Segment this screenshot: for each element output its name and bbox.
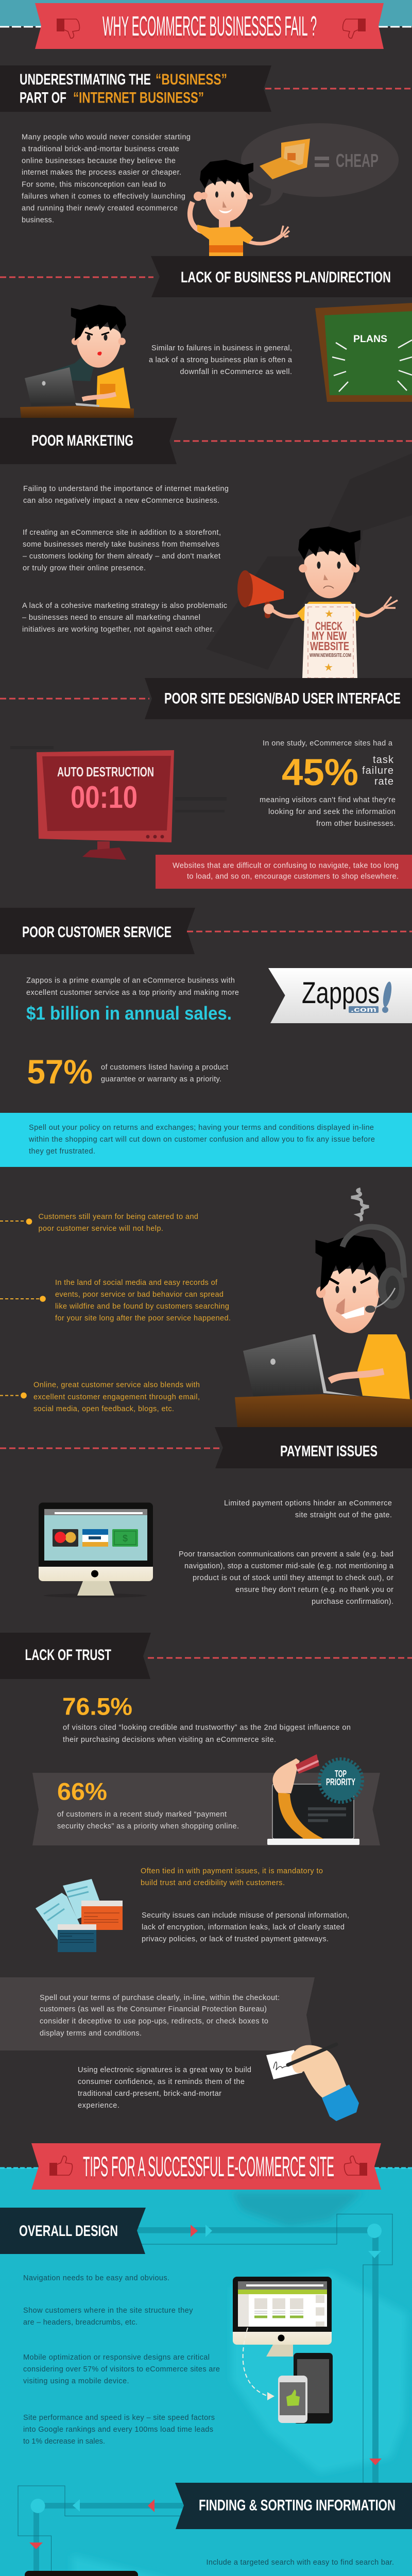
text: poor marketing paragraphs: or truly grow their online presence. xyxy=(23,564,146,572)
badge: top priority xyxy=(319,1759,363,1802)
icon: dollar bill: $ xyxy=(123,1533,128,1544)
flow connector: finding xyxy=(18,2486,184,2576)
text: zappos example: $1 billion in annual sales. xyxy=(26,1003,232,1024)
stat: 45 percent task failure: from other businesses. xyxy=(316,820,396,828)
point: social media: In the land of social media and easy records of xyxy=(55,1279,218,1287)
text: overall design tips: considering over 57% of visitors to eCommerce sites are xyxy=(23,2365,220,2374)
text: limited payment options: product is out of stock until they attempt to check out), or xyxy=(193,1574,393,1582)
stat: 45 percent task failure: looking for and seek the information xyxy=(268,808,396,816)
stat: 57 percent xyxy=(27,1053,228,1091)
text: tied with payment issues: lack of encryption, information leaks, lack of clearly stated xyxy=(142,1923,345,1931)
text: overall design tips xyxy=(23,2274,220,2446)
heading: overall design xyxy=(0,2208,146,2254)
stat: 76.5 percent: of visitors cited “looking credible and trustworthy” as the 2nd biggest influence on xyxy=(63,1724,351,1732)
panel: 66 percent payment security: security checks” as a priority when shopping online. xyxy=(57,1822,239,1831)
text: tied with payment issues: Security issues can include misuse of personal information, xyxy=(142,1911,349,1920)
text: electronic signatures: experience. xyxy=(78,2102,119,2110)
panel: 66 percent payment security: of customers in a recent study marked “payment xyxy=(57,1810,227,1819)
stat: 45 percent task failure xyxy=(260,739,396,828)
character: thinking man xyxy=(190,160,289,256)
heading: poor marketing xyxy=(0,418,412,464)
text: poor marketing paragraphs: A lack of a cohesive marketing strategy is also problematic xyxy=(22,602,227,610)
panel: spell out terms of purchase: Spell out your terms of purchase clearly, in-line, within the checkout: xyxy=(40,1994,280,2002)
text: limited payment options: navigation), stop a customer mid-sale (e.g. not mentioning a xyxy=(184,1562,394,1570)
heading: lack of trust: LACK OF TRUST xyxy=(25,1647,111,1664)
text: tied with payment issues: build trust and credibility with customers. xyxy=(141,1879,285,1887)
stat: 57 percent: of customers listed having a product xyxy=(101,1063,228,1072)
point: social media: events, poor service or bad behavior can spread xyxy=(55,1291,224,1299)
logo: zappos: .com xyxy=(351,1005,376,1013)
chalkboard: plans xyxy=(315,303,412,402)
text: limited payment options: Limited payment options hinder an eCommerce xyxy=(224,1499,392,1507)
text: poor marketing paragraphs: – businesses need to ensure all marketing channel xyxy=(22,614,200,622)
stat: 57 percent: 57% xyxy=(27,1053,93,1091)
text: overall design tips: Mobile optimization or responsive designs are critical xyxy=(23,2353,210,2362)
title ribbon: why ecommerce businesses fail xyxy=(35,3,384,49)
apron: ★ xyxy=(324,608,334,620)
point: online customer service: excellent customer engagement through email, xyxy=(33,1393,200,1401)
heading: poor marketing: POOR MARKETING xyxy=(31,432,133,449)
stat: 45 percent task failure: 45% xyxy=(282,752,358,793)
point: customers still yearn xyxy=(0,1213,198,1233)
text: many people: and running their newly created ecommerce xyxy=(22,205,178,213)
text: overall design tips: Site performance and speed is key – site speed factors xyxy=(23,2414,215,2422)
desk xyxy=(235,1394,412,1427)
chalkboard: plans: PLANS xyxy=(353,334,387,345)
speech bubble: laptop equals cheap: CHEAP xyxy=(336,150,379,171)
text: many people: For some, this misconception can lead to xyxy=(22,180,166,189)
text: electronic signatures: Using electronic signatures is a great way to build xyxy=(78,2066,251,2074)
heading: poor site design xyxy=(0,678,412,719)
heading: lack of business plan xyxy=(0,256,412,297)
text: zappos example xyxy=(26,977,239,1024)
text: tied with payment issues xyxy=(141,1867,349,1943)
text: limited payment options: purchase confirmation). xyxy=(312,1598,393,1606)
heading: underestimating the business xyxy=(0,65,412,112)
point: social media: for your site long after the poor service happened. xyxy=(55,1314,231,1323)
callout: difficult websites: Websites that are difficult or confusing to navigate, take too long xyxy=(173,861,399,870)
badge: top priority: PRIORITY xyxy=(326,1777,355,1787)
text: poor marketing paragraphs: some businesses merely take business from themselves xyxy=(23,540,219,549)
callout: spell out your policy: within the shopping cart will cut down on customer confusion and allow you to fix any issue before xyxy=(28,1136,375,1144)
apron: MY NEW xyxy=(312,629,347,642)
apron: CHECK xyxy=(315,619,342,633)
stat: 45 percent task failure: rate xyxy=(374,776,393,787)
apron xyxy=(302,604,357,678)
icon: megaphone xyxy=(237,570,284,618)
text: similar to failures xyxy=(149,344,293,376)
callout: spell out your policy: Spell out your policy on returns and exchanges; having your terms and conditions displayed in-line xyxy=(29,1124,374,1132)
text: poor marketing paragraphs: – customers looking for them already – and don't market xyxy=(23,552,220,561)
text: poor marketing paragraphs xyxy=(22,485,229,634)
heading: poor customer service xyxy=(0,908,412,954)
monitor: auto destruction: 00:10 xyxy=(71,780,138,815)
text: overall design tips: Navigation needs to be easy and obvious. xyxy=(23,2274,169,2282)
apron: ★ xyxy=(324,662,333,673)
text: many people: failures when it comes to effectively launching xyxy=(22,193,185,201)
tips ribbon: tips for a successful e-commerce site xyxy=(31,2143,381,2190)
text: zappos example: excellent customer service as a top priority and making more xyxy=(26,989,239,997)
text: poor marketing paragraphs: If creating an eCommerce site in addition to a storefront, xyxy=(23,529,221,537)
point: online customer service: Online, great customer service also blends with xyxy=(33,1381,200,1389)
stat: 76.5 percent: 76.5% xyxy=(62,1693,132,1720)
callout: spell out your policy: they get frustrated. xyxy=(29,1147,95,1156)
icon: bank card xyxy=(82,1529,108,1547)
speech bubble: laptop equals cheap xyxy=(241,123,399,206)
icon: thumb up left xyxy=(49,2156,72,2176)
panel: 66 percent payment security: 66% xyxy=(57,1778,107,1805)
heading: finding and sorting xyxy=(175,2483,412,2529)
heading: payment issues xyxy=(0,1427,412,1468)
point: social media xyxy=(0,1279,231,1323)
icon: credit card xyxy=(53,1529,78,1547)
stat: 45 percent task failure: task xyxy=(373,754,394,766)
panel: spell out terms of purchase: customers (as well as the Consumer Financial Protection Bureau) xyxy=(40,2005,267,2013)
logo: zappos: Zappos xyxy=(302,976,380,1010)
callout: difficult websites: to load, and so on, encourage customers to shop elsewhere. xyxy=(187,873,399,881)
devices: desktop and phones xyxy=(233,2277,333,2424)
monitor: auto destruction: AUTO DESTRUCTION xyxy=(57,764,154,779)
text: many people: internet makes the process easier or cheaper. xyxy=(22,168,181,177)
text: many people xyxy=(22,133,191,224)
text: similar to failures: downfall in eCommerce as well. xyxy=(180,368,292,376)
text: many people: online businesses because they believe the xyxy=(22,157,176,165)
text: tied with payment issues: Often tied in with payment issues, it is mandatory to xyxy=(141,1867,323,1875)
icon: hand signing xyxy=(266,2044,359,2121)
heading: underestimating the business: UNDERESTIMATING THE xyxy=(20,71,151,88)
text: limited payment options: Poor transaction communications can prevent a sale (e.g. bad xyxy=(179,1550,393,1558)
text: tied with payment issues: privacy policies, or lack of trusted payment gateways. xyxy=(142,1935,329,1943)
icon: thumb down right xyxy=(343,19,366,38)
text: limited payment options: ensure they don't return (e.g. no thank you or xyxy=(235,1586,393,1594)
character: man at laptop with glow xyxy=(20,304,134,418)
heading: poor customer service: POOR CUSTOMER SERVICE xyxy=(22,924,171,941)
text: poor marketing paragraphs: can also negatively impact a new eCommerce business. xyxy=(23,497,219,505)
panel: 66 percent payment security xyxy=(32,1754,380,1845)
callout: difficult websites xyxy=(156,855,412,889)
heading: overall design: OVERALL DESIGN xyxy=(19,2223,118,2240)
heading: underestimating the business: “INTERNET BUSINESS” xyxy=(73,90,204,106)
flow connector: overall design xyxy=(137,2214,392,2483)
callout: spell out your policy xyxy=(0,1113,412,1167)
icon: documents and windows xyxy=(36,1879,123,1952)
heading: underestimating the business: “BUSINESS” xyxy=(156,71,227,88)
text: poor marketing paragraphs: initiatives are working together, not against each other. xyxy=(22,625,214,634)
panel: spell out terms of purchase: display terms and conditions. xyxy=(40,2029,142,2038)
icon: thumb down left xyxy=(57,19,79,38)
text: overall design tips: Show customers where in the site structure they xyxy=(23,2307,193,2315)
heading: payment issues: PAYMENT ISSUES xyxy=(280,1443,377,1460)
point: customers still yearn: Customers still yearn for being catered to and xyxy=(38,1213,198,1221)
icon: laptop with hand and card xyxy=(267,1754,363,1845)
character: man with megaphone and apron xyxy=(237,527,398,678)
text: similar to failures: Similar to failures in business in general, xyxy=(151,344,292,352)
text: many people: Many people who would never consider starting xyxy=(22,133,191,142)
icon: orange laptop xyxy=(260,139,310,179)
stat: 45 percent task failure: meaning visitors can't find what they're xyxy=(260,796,396,804)
text: limited payment options: site straight out of the gate. xyxy=(295,1511,392,1519)
heading: lack of trust xyxy=(0,1633,412,1679)
text: electronic signatures: traditional card-present, brick-and-mortar xyxy=(78,2090,221,2098)
apron: WWW.NEWEBSITE.COM xyxy=(310,653,351,658)
stat: 45 percent task failure: In one study, eCommerce sites had a xyxy=(263,739,393,748)
character: angry support agent xyxy=(235,1189,412,1427)
point: online customer service xyxy=(0,1381,200,1413)
monitor: payment cards xyxy=(39,1502,153,1598)
monitor: auto destruction xyxy=(10,746,227,860)
stat: 57 percent: guarantee or warranty as a priority. xyxy=(101,1075,221,1083)
badge: top priority: TOP xyxy=(335,1769,347,1779)
text: many people: business. xyxy=(22,216,54,224)
point: online customer service: social media, open feedback, blogs, etc. xyxy=(33,1405,174,1413)
panel: spell out terms of purchase xyxy=(0,1977,315,2050)
stat: 76.5 percent xyxy=(62,1693,351,1744)
stat: 45 percent task failure: failure xyxy=(362,765,393,776)
text: poor marketing paragraphs: Failing to understand the importance of internet marketing xyxy=(23,485,229,493)
text: overall design tips: to 1% decrease in sales. xyxy=(23,2437,105,2446)
icon: thumb up right xyxy=(345,2156,367,2176)
stat: 76.5 percent: their purchasing decisions when visiting an eCommerce site. xyxy=(63,1736,276,1744)
text: limited payment options xyxy=(179,1499,394,1606)
apron: WEBSITE xyxy=(310,639,349,653)
text: overall design tips: are – headers, breadcrumbs, etc. xyxy=(23,2318,138,2327)
text: electronic signatures: consumer confidence, as it reminds them of the xyxy=(78,2078,245,2086)
text: overall design tips: visiting using a mobile device. xyxy=(23,2377,129,2385)
heading: underestimating the business: PART OF xyxy=(20,90,66,106)
point: customers still yearn: poor customer service will not help. xyxy=(38,1225,163,1233)
text: many people: a traditional brick-and-mortar business create xyxy=(22,145,179,153)
text: zappos example: Zappos is a prime example of an eCommerce business with xyxy=(26,977,235,985)
text: similar to failures: a lack of a strong business plan is often a xyxy=(149,356,293,364)
text: overall design tips: into Google rankings and every 100ms load time leads xyxy=(23,2426,213,2434)
laptop xyxy=(243,1334,323,1397)
logo: zappos xyxy=(268,968,412,1023)
text: finding tips: Include a targeted search with easy to find search bar. xyxy=(206,2558,394,2567)
text: electronic signatures xyxy=(78,2066,251,2110)
monitor: search xyxy=(25,2571,138,2576)
point: social media: like wildfire and be found by customers searching xyxy=(55,1302,229,1311)
panel: spell out terms of purchase: consider it deceptive to use pop-ups, redirects, or check boxes to xyxy=(40,2018,268,2026)
icon: dollar bill xyxy=(112,1529,138,1547)
